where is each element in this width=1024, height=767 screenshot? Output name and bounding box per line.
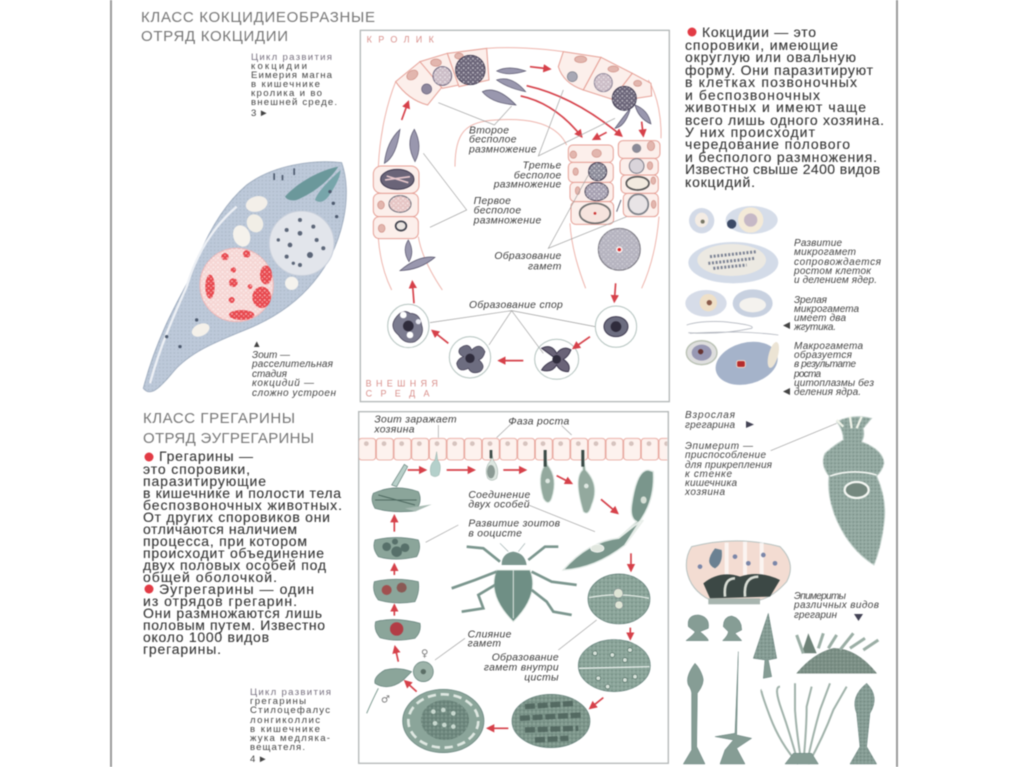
caption: epimerite: Эпимерит — <box>685 441 754 452</box>
caption: gamete development: Макрогамета <box>794 341 863 352</box>
heading: class Coccidia <box>141 9 375 45</box>
caption: zoite: расселительная <box>251 359 334 370</box>
caption: zoite: сложно устроен <box>252 388 336 399</box>
labels: coccidia cycle: бесполое <box>469 134 517 146</box>
crown with tentacles <box>797 633 878 673</box>
labels: coccidia cycle: размножение <box>493 180 562 191</box>
caption: adult gregarine <box>685 410 754 431</box>
caption: zoite: стадия <box>252 369 288 380</box>
labels: coccidia cycle: размножение <box>473 215 542 226</box>
caption: coccidia life cycle: Цикл развития <box>251 52 332 63</box>
text block: gregarines description: отличаются наличием <box>143 521 297 537</box>
caption: coccidia life cycle: 3 ► <box>251 108 268 119</box>
caption: gamete development: цитоплазмы без <box>794 377 874 389</box>
text block: gregarines description: двух половых особей под <box>143 557 326 573</box>
caption: gregarine life cycle: в кишечнике <box>250 724 320 735</box>
text block: gregarines description: около 1000 видов <box>143 629 269 645</box>
red arrows, coccidia cycle <box>402 67 643 361</box>
illustration: adult gregarine and epimerites <box>683 416 885 764</box>
caption: epimerite: хозяина <box>684 487 725 498</box>
caption: gamete development: образуется <box>794 349 853 361</box>
caption: epimerite: приспособление <box>685 449 766 461</box>
labels: gregarine cycle: цисты <box>524 672 559 683</box>
caption: adult gregarine: Взрослая <box>685 410 736 421</box>
caption: gamete development: Зрелая <box>794 295 828 306</box>
top-left epithelial cells <box>396 48 489 105</box>
caption: gamete development: Развитие <box>794 238 842 249</box>
gametes fusing: ♀ <box>421 649 428 660</box>
text block: coccidia description: кокцидий. <box>685 174 755 190</box>
top-right epithelial cells <box>558 52 652 128</box>
caption: adult gregarine: грегарина <box>685 420 735 431</box>
beetle <box>452 543 577 622</box>
syzygy: two joined gregarines <box>563 470 653 570</box>
caption: gamete development: микрогамета <box>794 304 859 315</box>
left column of cells <box>373 166 419 239</box>
text block: gregarines description: грегарины. <box>143 641 221 657</box>
labels: gregarine cycle: гамет <box>468 639 501 650</box>
text block: gregarines description: паразитирующие <box>143 473 266 489</box>
labels: coccidia cycle: размножение <box>468 145 537 156</box>
labels: gregarine cycle: Развитие зоитов <box>468 519 561 530</box>
caption: gregarine life cycle: Цикл развития <box>250 687 331 698</box>
text block: gregarines description: Эугрегарины — один <box>159 581 314 597</box>
caption: gregarine life cycle: грегарины <box>250 696 306 707</box>
caption: gamete development: в результате <box>794 359 856 370</box>
caption: epimerite <box>684 441 773 498</box>
caption: zoite <box>251 339 336 399</box>
labels: gregarine cycle: Слияние <box>468 629 512 640</box>
text block: gregarines description: Грегарины — <box>159 448 253 464</box>
labels: gregarine cycle: хозяина <box>373 424 415 435</box>
text block: coccidia description: споровики, имеющие <box>685 37 838 53</box>
labels: coccidia cycle: гамет <box>528 261 562 272</box>
text block: coccidia description: и бесполого размножения. <box>685 149 877 165</box>
macrogamete <box>598 228 640 270</box>
caption: gamete development <box>783 238 882 398</box>
caption: various epimerites: Эпимериты <box>794 591 847 602</box>
label: external environment: СРЕДА <box>366 389 438 399</box>
label: external environment <box>366 379 442 399</box>
text block: coccidia description: в клетках позвоночных <box>685 74 857 90</box>
heading: class Coccidia: ОТРЯД КОКЦИДИИ <box>141 28 288 45</box>
labels: gregarine cycle: Фаза роста <box>508 416 570 427</box>
caption: zoite: кокцидий — <box>252 378 315 389</box>
caption: coccidia life cycle: в кишечнике <box>251 79 320 90</box>
text block: coccidia description: У них происходит <box>685 124 816 140</box>
gametes fusing: ♂ <box>381 694 390 705</box>
caption: gregarine life cycle: 4 ► <box>250 754 268 765</box>
text block: coccidia description: чередование полового <box>685 136 850 152</box>
right columns of cells <box>568 141 660 224</box>
gregarine growth stages <box>392 450 595 513</box>
heading: class Gregarines: КЛАСС ГРЕГАРИНЫ <box>143 410 295 427</box>
caption: gamete development: имеет два <box>794 313 846 324</box>
caption: epimerite: кишечника <box>685 478 737 489</box>
text block: gregarines description: процесса, при котором <box>143 533 307 549</box>
labels: coccidia cycle: Образование спор <box>469 299 563 311</box>
labels: gregarine cycle: гамет внутри <box>484 662 559 673</box>
panel: coccidia cycle <box>360 30 669 402</box>
adult gregarine <box>823 416 885 565</box>
caption: gregarine life cycle: вещателя. <box>250 742 305 753</box>
caption: coccidia life cycle: кокцидии <box>251 61 307 72</box>
caption: various epimerites: грегарин <box>794 610 837 621</box>
caption: coccidia life cycle <box>251 52 337 119</box>
text block: gregarines description: Они размножаются лишь <box>143 605 322 621</box>
caption: various epimerites: различных видов <box>793 600 879 611</box>
page side rules <box>110 0 898 767</box>
text block: coccidia description <box>685 24 884 190</box>
text block: coccidia description: всего лишь одного хозяина. <box>685 112 884 128</box>
text block: gregarines description: беспозвоночных животных. <box>143 497 342 513</box>
text block: gregarines description <box>143 448 342 657</box>
text block: gregarines description: общей оболочкой. <box>143 569 277 585</box>
caption: coccidia life cycle: Еимерия магна <box>251 70 333 81</box>
caption: zoite: ▲ <box>252 339 262 350</box>
text block: gregarines description: из отрядов грегарин. <box>143 593 297 609</box>
sporozoites left <box>384 129 435 271</box>
labels: gregarine cycle: Образование <box>492 651 559 663</box>
labels: coccidia cycle: Второе <box>469 125 509 136</box>
caption: zoite: Зоит — <box>252 350 291 361</box>
epimerite: broad crown <box>686 541 790 604</box>
cysts and oocysts <box>372 488 650 753</box>
intestinal epithelium <box>359 438 667 461</box>
text block: gregarines description: От других споровиков они <box>143 509 330 525</box>
long-stalk epimerites <box>683 652 877 764</box>
text block: gregarines description: происходит объединение <box>143 545 324 561</box>
labels: coccidia cycle: бесполое <box>474 204 521 216</box>
caption: coccidia life cycle: внешней среде. <box>251 97 337 108</box>
small epimerites <box>686 613 777 678</box>
leader lines <box>423 90 627 353</box>
caption: gregarine life cycle: жука медляка- <box>250 733 330 744</box>
labels: gregarine cycle: в ооцисте <box>468 529 522 540</box>
gut wall outline <box>378 48 661 290</box>
caption: various epimerites <box>793 591 879 621</box>
labels: coccidia cycle: Образование <box>494 250 562 262</box>
labels: coccidia cycle: бесполое <box>514 169 562 181</box>
caption: gregarine life cycle <box>250 687 331 765</box>
text block: coccidia description: и беспозвоночных <box>685 87 820 103</box>
text block: coccidia description: округлую или овальную <box>685 49 856 65</box>
label: external environment: ВНЕШНЯЯ <box>366 379 442 389</box>
text block: coccidia description: Кокцидии — это <box>702 24 816 40</box>
labels: coccidia cycle: Первое <box>474 196 511 207</box>
heading: class Gregarines: ОТРЯД ЭУГРЕГАРИНЫ <box>143 430 314 447</box>
leader lines <box>426 423 597 660</box>
labels: gregarine cycle <box>373 414 570 683</box>
spore cysts <box>388 304 637 379</box>
caption: epimerite: для прикрепления <box>685 460 773 471</box>
labels: gregarine cycle: Зоит заражает <box>374 414 457 425</box>
caption: coccidia life cycle: кролика и во <box>251 88 322 99</box>
text block: coccidia description: Известно свыше 2400 видов <box>685 161 880 177</box>
caption: gamete development: и делением ядер. <box>794 275 877 286</box>
label: rabbit: КРОЛИК <box>367 35 440 45</box>
panel: gregarine cycle <box>359 412 668 763</box>
labels: coccidia cycle <box>468 125 563 311</box>
caption: epimerite: к стенке <box>685 469 732 480</box>
caption: gamete development: сопровождается <box>794 257 882 268</box>
text block: gregarines description: в кишечнике и полости тела <box>143 485 341 501</box>
caption: gamete development: роста <box>793 369 821 380</box>
merozoites <box>482 68 526 105</box>
text block: coccidia description: форму. Они паразитируют <box>685 62 874 78</box>
heading: class Gregarines <box>143 410 314 447</box>
illustration: coccidia zoite <box>143 162 346 392</box>
text block: coccidia description: животных и имеют чаще <box>685 99 866 115</box>
caption: gamete development: микрогамет <box>794 247 856 258</box>
caption: gregarine life cycle: Стилоцефалус <box>250 705 330 716</box>
labels: gregarine cycle: Соединение <box>468 490 531 501</box>
text block: gregarines description: это споровики, <box>143 461 250 477</box>
illustrations: gamete development <box>685 206 783 391</box>
labels: coccidia cycle: Третье <box>523 160 562 171</box>
caption: gregarine life cycle: лонгиколлис <box>250 715 320 726</box>
caption: gamete development: деления ядра. <box>794 387 861 398</box>
red arrows, gregarine cycle <box>394 470 631 728</box>
caption: gamete development: ростом клеток <box>793 266 872 277</box>
caption: gamete development: жгутика. <box>793 322 836 333</box>
heading: class Coccidia: КЛАСС КОКЦИДИЕОБРАЗНЫЕ <box>141 9 375 26</box>
gametes fusing <box>367 649 433 713</box>
labels: gregarine cycle: двух особей <box>468 499 530 511</box>
text block: gregarines description: половым путем. Известно <box>143 617 325 633</box>
